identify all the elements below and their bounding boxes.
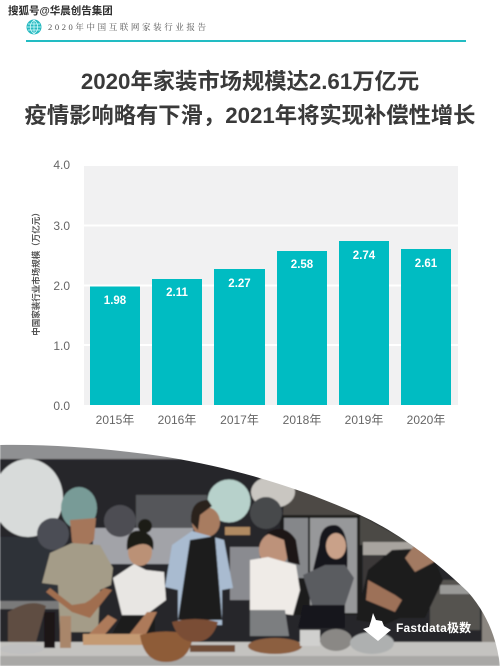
bar values: 2.61 [415,258,438,270]
person 2 [85,519,166,640]
x axis labels: 2015年 [96,413,134,427]
bar values: 2.58 [291,259,314,271]
photo: people cooking in kitchen [0,444,500,666]
x axis labels: 2016年 [158,413,196,427]
person 3 [165,500,233,625]
countertop and bowls [0,603,500,666]
y axis title: 中国家装行业市场规模（万亿元） [31,208,41,336]
title [25,69,475,128]
y axis labels: 3.0 [53,219,70,233]
y axis labels: 4.0 [53,158,70,172]
x axis labels: 2018年 [283,413,321,427]
x axis labels: 2017年 [220,413,259,427]
x axis labels: 2020年 [407,413,445,427]
logo: Fastdata [363,613,471,641]
person 5 [298,525,354,628]
y axis labels [53,158,70,413]
bar chart [31,158,458,427]
header band [26,20,209,34]
y axis labels: 2.0 [53,279,70,293]
bar values: 2.74 [353,250,376,262]
bar values: 1.98 [104,295,127,307]
logo text: Fastdata极数 [396,621,471,635]
header text: 2020年中国互联网家装行业报告 [48,22,209,32]
x axis labels: 2019年 [345,413,383,427]
bar values: 2.27 [228,278,251,290]
header rule [26,40,466,42]
person 6 [356,546,443,625]
icon: globe [26,20,42,34]
title: 2020年家装市场规模达2.61万亿元 [81,69,419,94]
person 4 [250,529,300,636]
x axis labels [96,413,445,427]
y axis labels: 0.0 [53,399,70,413]
bar values: 2.11 [166,287,188,299]
icon: iceberg [363,613,391,641]
y axis labels: 1.0 [53,339,70,353]
person 1 [42,518,113,632]
bars [90,241,451,405]
watermark: 搜狐号@华晨创告集团 [8,5,113,17]
bar values [104,250,438,307]
title: 疫情影响略有下滑，2021年将实现补偿性增长 [25,102,475,128]
pendant lamps [0,459,295,550]
room background [0,444,496,643]
